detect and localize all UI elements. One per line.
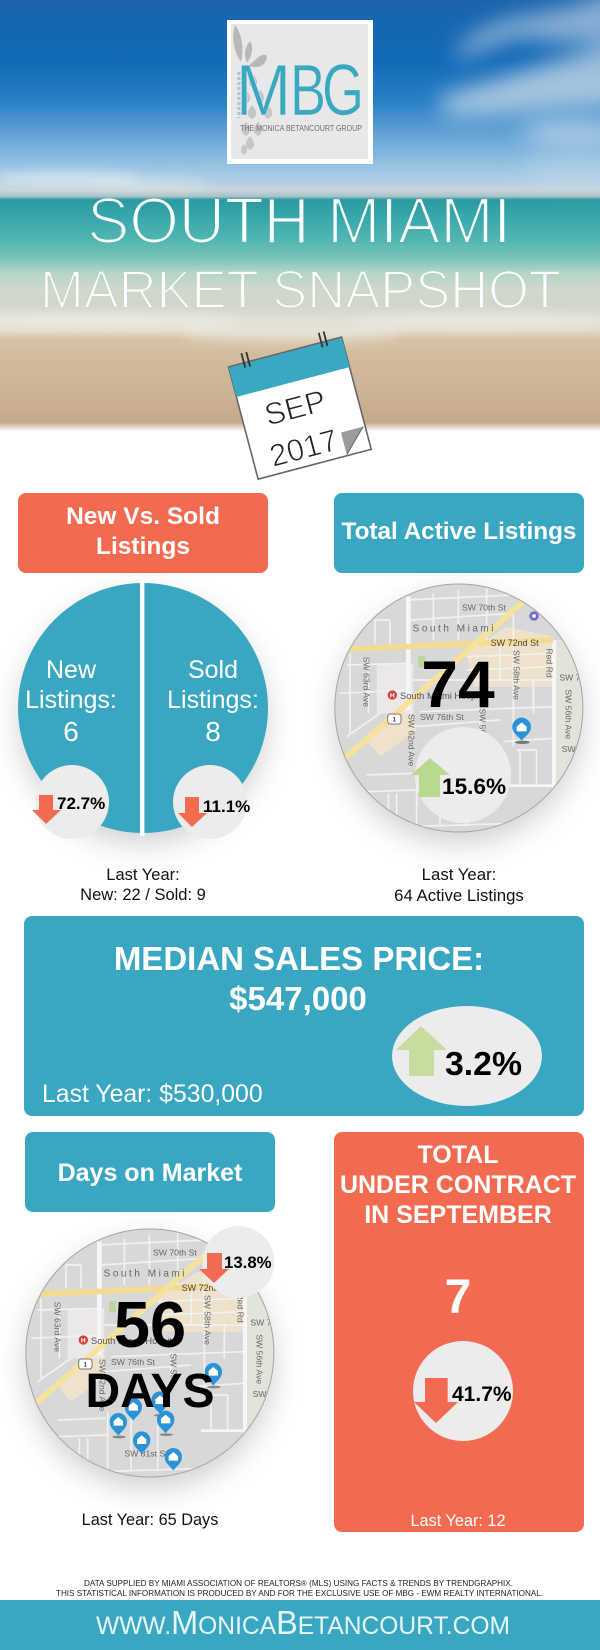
map circle: South Miami Hospital <box>91 1336 179 1346</box>
logo tagline: THE MONICA BETANCOURT GROUP <box>240 123 362 133</box>
logo <box>227 20 373 164</box>
map circle: SW <box>562 744 576 754</box>
heading: total active listings: Total Active Listings <box>342 518 576 545</box>
map circle: Red Rd <box>545 648 555 678</box>
price change badge <box>392 1006 542 1106</box>
new listings value <box>25 656 117 747</box>
heading: days on market: Days on Market <box>58 1159 243 1187</box>
heading: new vs sold: New Vs. Sold <box>66 503 220 530</box>
map circle: 1 <box>393 717 397 723</box>
calendar rings <box>241 332 327 368</box>
heading: total under contract: UNDER CONTRACT <box>340 1171 576 1199</box>
heading: total under contract: TOTAL <box>417 1141 499 1169</box>
map circle: SW 63rd Ave <box>52 1302 62 1352</box>
map circle <box>21 1225 281 1482</box>
calendar month: SEP <box>261 383 330 433</box>
last year note: Last Year: <box>422 865 496 884</box>
days value <box>86 1288 214 1418</box>
disclaimer <box>56 1578 543 1598</box>
map circle: SW 76th St <box>111 1357 155 1367</box>
sold listings value: Listings: <box>167 686 259 714</box>
sold change badge <box>173 765 250 839</box>
map circle: SW 58th Ave <box>511 650 521 700</box>
new change badge <box>32 765 109 839</box>
map circle: SW 62nd Ave <box>407 714 417 766</box>
panel: days on market <box>21 1132 281 1529</box>
disclaimer: THIS STATISTICAL INFORMATION IS PRODUCED BY AND FOR THE EXCLUSIVE USE OF MBG - EWM REALTY INTERNATIONAL. <box>56 1588 543 1598</box>
heading: total active listings <box>334 493 584 573</box>
soft shadows behind circles <box>21 598 581 1487</box>
disclaimer: DATA SUPPLIED BY MIAMI ASSOCIATION OF REALTORS® (MLS) USING FACTS & TRENDS BY TRENDGRAPHIX. <box>84 1578 513 1588</box>
title <box>40 184 561 320</box>
new listings value: 6 <box>63 716 79 747</box>
map circle: SW 7 <box>250 1317 272 1327</box>
map circle: South Miami Hospital <box>400 691 488 701</box>
map circle: SW 62nd Ave <box>98 1359 108 1411</box>
map circle: SW 58th Ave <box>202 1295 212 1345</box>
last year note: Last Year: $530,000 <box>42 1081 263 1108</box>
last year note <box>80 866 206 904</box>
heading: new vs sold: Listings <box>96 533 190 560</box>
sold listings value <box>167 656 259 747</box>
median price value: $547,000 <box>229 980 367 1017</box>
heading: total under contract <box>340 1141 576 1229</box>
icon: pineapple <box>233 25 272 155</box>
panel: median sales price <box>24 916 584 1116</box>
total active value: 74 <box>421 647 495 721</box>
calendar year: 2017 <box>266 422 341 474</box>
days change badge: 13.8% <box>224 1253 272 1272</box>
panel: total active listings <box>330 493 590 905</box>
map circle: SW 72nd St <box>491 638 539 648</box>
contract change badge <box>413 1341 513 1441</box>
heading: new vs sold <box>18 493 268 573</box>
map circle: SW 56th Ave <box>254 1334 264 1384</box>
last year note: Last Year: 12 <box>410 1512 506 1530</box>
map circle: Red Rd <box>236 1293 246 1323</box>
sold listings value: 8 <box>205 716 221 747</box>
last year note <box>394 865 524 905</box>
new change badge: 72.7% <box>57 794 105 813</box>
heading: total under contract: IN SEPTEMBER <box>364 1201 552 1229</box>
map circle: SW 63rd Ave <box>361 657 371 707</box>
calendar page curl <box>341 427 369 455</box>
panel: new vs sold listings <box>18 493 268 904</box>
map circle: SW 59th <box>477 708 487 742</box>
new listings value: Listings: <box>25 686 117 714</box>
days value: DAYS <box>86 1365 214 1418</box>
contract change badge: 41.7% <box>452 1383 512 1406</box>
map circle: SW 76th St <box>420 712 464 722</box>
map circle: South Miami <box>104 1269 187 1280</box>
footer website bar <box>0 1600 600 1650</box>
map circle: H <box>81 1338 86 1345</box>
logo letters <box>236 51 364 131</box>
logo letters: B <box>290 51 326 131</box>
last year note: Last Year: <box>106 866 180 884</box>
map circle: SW 70th St <box>153 1248 197 1258</box>
map circle: SW 56th Ave <box>563 689 573 739</box>
new listings value: New <box>46 656 97 684</box>
days value: 56 <box>114 1288 186 1361</box>
map circle: SW <box>253 1389 267 1399</box>
map circle: 1 <box>84 1362 88 1368</box>
logo letters: G <box>322 51 364 131</box>
chart: split circle <box>18 580 268 836</box>
active change badge <box>411 727 511 823</box>
sold change badge: 11.1% <box>203 797 250 816</box>
map circle: SW 59th <box>168 1353 178 1387</box>
map circle: South Miami <box>413 624 496 635</box>
footer website bar: WWW.MONICABETANCOURT.COM <box>96 1604 510 1641</box>
last year note: 64 Active Listings <box>394 886 524 905</box>
map circle: SW 72nd St <box>182 1283 230 1293</box>
map circle: SW 7 <box>559 672 581 682</box>
map circle: SW 70th St <box>462 603 506 613</box>
icon: calendar <box>226 327 371 479</box>
under contract value: 7 <box>445 1271 471 1324</box>
last year note: New: 22 / Sold: 9 <box>80 886 206 904</box>
icons: listing pins <box>110 1363 222 1471</box>
hero beach photo <box>0 0 600 432</box>
panel: total under contract <box>334 1132 584 1532</box>
days change badge <box>199 1226 274 1298</box>
title line 2: MARKET SNAPSHOT <box>40 260 561 320</box>
map circle <box>330 580 590 837</box>
title line 1: SOUTH MIAMI <box>87 184 511 257</box>
logo letters: M <box>236 51 291 131</box>
price change badge: 3.2% <box>445 1045 522 1082</box>
heading: days on market <box>25 1132 275 1212</box>
last year note: Last Year: 65 Days <box>82 1511 218 1529</box>
sold listings value: Sold <box>188 656 238 684</box>
heading: median sales price: MEDIAN SALES PRICE: <box>114 940 484 977</box>
active change badge: 15.6% <box>442 774 506 799</box>
map circle: H <box>390 693 395 700</box>
map circle: SW 81st St <box>124 1449 168 1459</box>
